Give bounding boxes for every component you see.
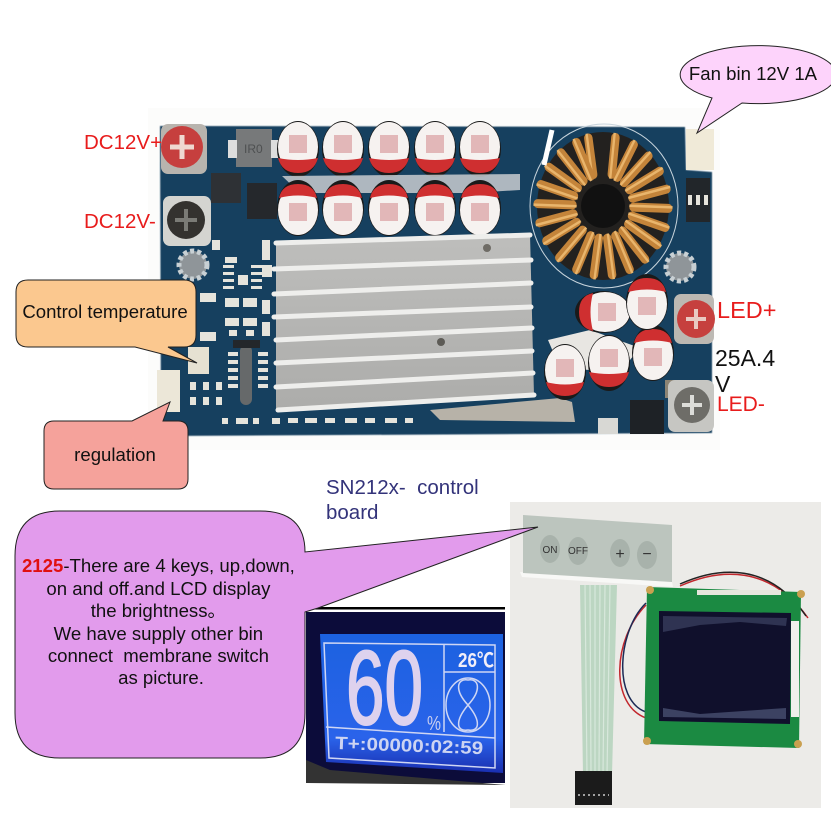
callout: key description: as picture. xyxy=(118,667,204,688)
label: 25A.4V: V xyxy=(715,371,731,397)
membrane tail xyxy=(575,585,617,805)
callout: control temperature: Control temperature xyxy=(22,301,188,322)
heading: SN212x control board: board xyxy=(326,501,378,524)
terminal DC12V+ xyxy=(161,124,207,174)
callout: key description: the brightness。 xyxy=(91,600,226,621)
connector: fan xyxy=(686,129,714,170)
membrane keypad: OFF xyxy=(568,546,588,557)
connector: regulation xyxy=(157,370,180,412)
label: DC12V-: DC12V- xyxy=(84,210,156,233)
inductor IR0 xyxy=(228,129,280,167)
terminal DC12V- xyxy=(163,196,211,246)
label: LED+: LED+ xyxy=(717,297,776,323)
callout: key description: connect membrane switch xyxy=(48,645,269,666)
LCD module xyxy=(643,586,805,748)
capacitors bottom row xyxy=(277,180,501,236)
label: LED-: LED- xyxy=(717,393,765,416)
callout: key description: 2125-There are 4 keys, up,down, xyxy=(22,555,295,576)
photo: LCD display: T+:00000:02:59 xyxy=(335,733,483,758)
photo: membrane switch and LCD module xyxy=(510,502,821,808)
output capacitors xyxy=(544,274,674,400)
callout: key description: We have supply other bin xyxy=(54,623,263,644)
heading: SN212x control board: SN212x- control xyxy=(326,476,479,499)
solder strip between capacitor rows xyxy=(282,174,520,193)
callout: regulation xyxy=(44,402,188,489)
heat sink xyxy=(274,234,575,422)
membrane keypad: − xyxy=(642,546,652,563)
callout: key description xyxy=(15,511,538,758)
callout: regulation: regulation xyxy=(74,444,156,465)
photo: LCD display: 26℃ xyxy=(458,650,494,672)
terminal LED+ xyxy=(674,294,715,344)
terminal LED- xyxy=(668,380,714,432)
wires xyxy=(620,605,646,718)
capacitors top row xyxy=(277,121,501,177)
connector: temperature xyxy=(188,347,209,374)
callout: control temperature xyxy=(16,280,197,363)
callout: key description: on and off.and LCD display xyxy=(46,578,271,599)
membrane keypad: + xyxy=(615,546,625,563)
callout: fan bin xyxy=(680,46,831,133)
inductor IR0: IR0 xyxy=(244,142,263,156)
SMD components, left area xyxy=(190,173,710,434)
photo: driver board xyxy=(148,108,720,450)
toroid coil xyxy=(530,124,678,288)
mounting holes xyxy=(179,251,694,281)
callout: fan bin: Fan bin 12V 1A xyxy=(689,63,818,84)
photo: LCD display: 60 xyxy=(346,630,423,747)
photo: LCD display xyxy=(306,607,506,785)
photo: LCD display: % xyxy=(427,713,441,735)
membrane keypad: ON xyxy=(542,545,558,556)
circuit board xyxy=(160,126,712,436)
membrane keypad xyxy=(520,515,673,587)
label: 25A.4V: 25A.4 xyxy=(715,345,775,371)
label: DC12V+: DC12V+ xyxy=(84,131,162,154)
